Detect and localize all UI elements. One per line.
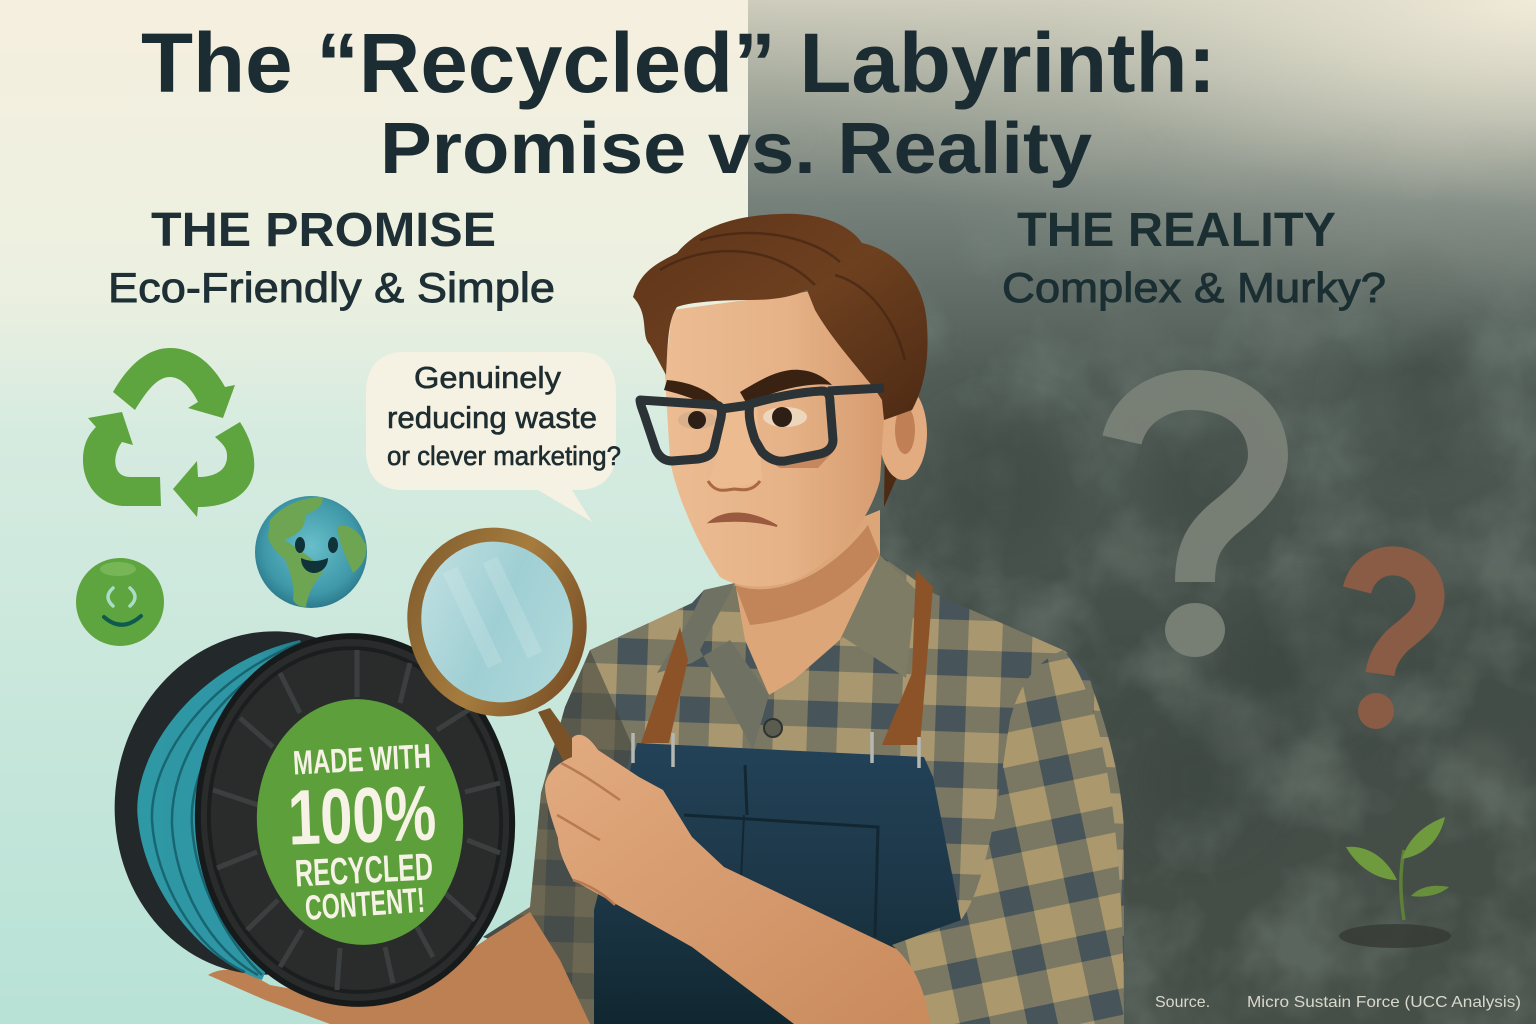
heading: the promise: [108, 204, 555, 311]
spool label: CONTENT!: [304, 881, 426, 928]
spool filament: [137, 640, 340, 980]
source line: [1155, 994, 1521, 1011]
hand under spool: [208, 912, 590, 1024]
person: right sleeve: [892, 650, 1124, 1024]
icon: seedling: [1339, 817, 1451, 948]
speech bubble: Genuinely: [414, 360, 562, 395]
icon: recycling arrows: [83, 348, 254, 517]
source line: Micro Sustain Force (UCC Analysis): [1247, 994, 1521, 1011]
person: suspenders: [641, 570, 933, 745]
icon: smiley: [76, 558, 164, 646]
person: ear: [879, 386, 927, 507]
spool front flange: [186, 625, 524, 1015]
icon: small rust question mark: [1357, 561, 1430, 729]
background: promise side: [0, 0, 748, 1024]
heading: the reality: THE REALITY: [1017, 204, 1336, 257]
spool label: RECYCLED: [294, 846, 434, 895]
title: [141, 16, 1216, 189]
person: brows: [664, 370, 832, 410]
person: apron: [594, 743, 975, 1024]
heading: the reality: [1002, 204, 1386, 311]
source line: Source.: [1155, 994, 1210, 1011]
person: shirt: [483, 555, 1124, 1024]
person: eyes: [678, 407, 807, 429]
speech bubble: or clever marketing?: [387, 441, 621, 471]
speech bubble: [366, 352, 621, 522]
person: neck: [733, 510, 880, 695]
person: hand holding magnifier: [545, 735, 933, 1024]
spool label: 100%: [287, 768, 437, 862]
person: hair: [633, 214, 928, 420]
icon: large grey question mark: [1122, 390, 1268, 657]
person: shirt button: [764, 719, 782, 737]
heading: the promise: THE PROMISE: [151, 204, 496, 257]
spool label: MADE WITH: [292, 737, 432, 783]
spool label: [247, 690, 473, 954]
speech bubble: reducing waste: [387, 400, 597, 435]
person: nose and mouth: [708, 408, 833, 526]
title: Promise vs. Reality: [380, 109, 1092, 189]
heading: the reality: Complex & Murky?: [1002, 264, 1386, 311]
person: left arm shadow: [483, 650, 632, 1024]
person: suspender clips: [633, 732, 919, 768]
background: reality side: [748, 0, 1536, 1024]
person: glasses: [640, 388, 884, 461]
title: The “Recycled” Labyrinth:: [141, 16, 1216, 110]
person: face: [665, 290, 885, 587]
filament spool: [93, 611, 524, 1015]
magnifying glass: [390, 511, 604, 766]
person: neck shadow: [735, 525, 880, 625]
icon: smiling earth: [255, 496, 367, 608]
person: collar: [657, 555, 916, 750]
spool back flange: [93, 611, 447, 995]
heading: the promise: Eco-Friendly & Simple: [108, 264, 555, 311]
